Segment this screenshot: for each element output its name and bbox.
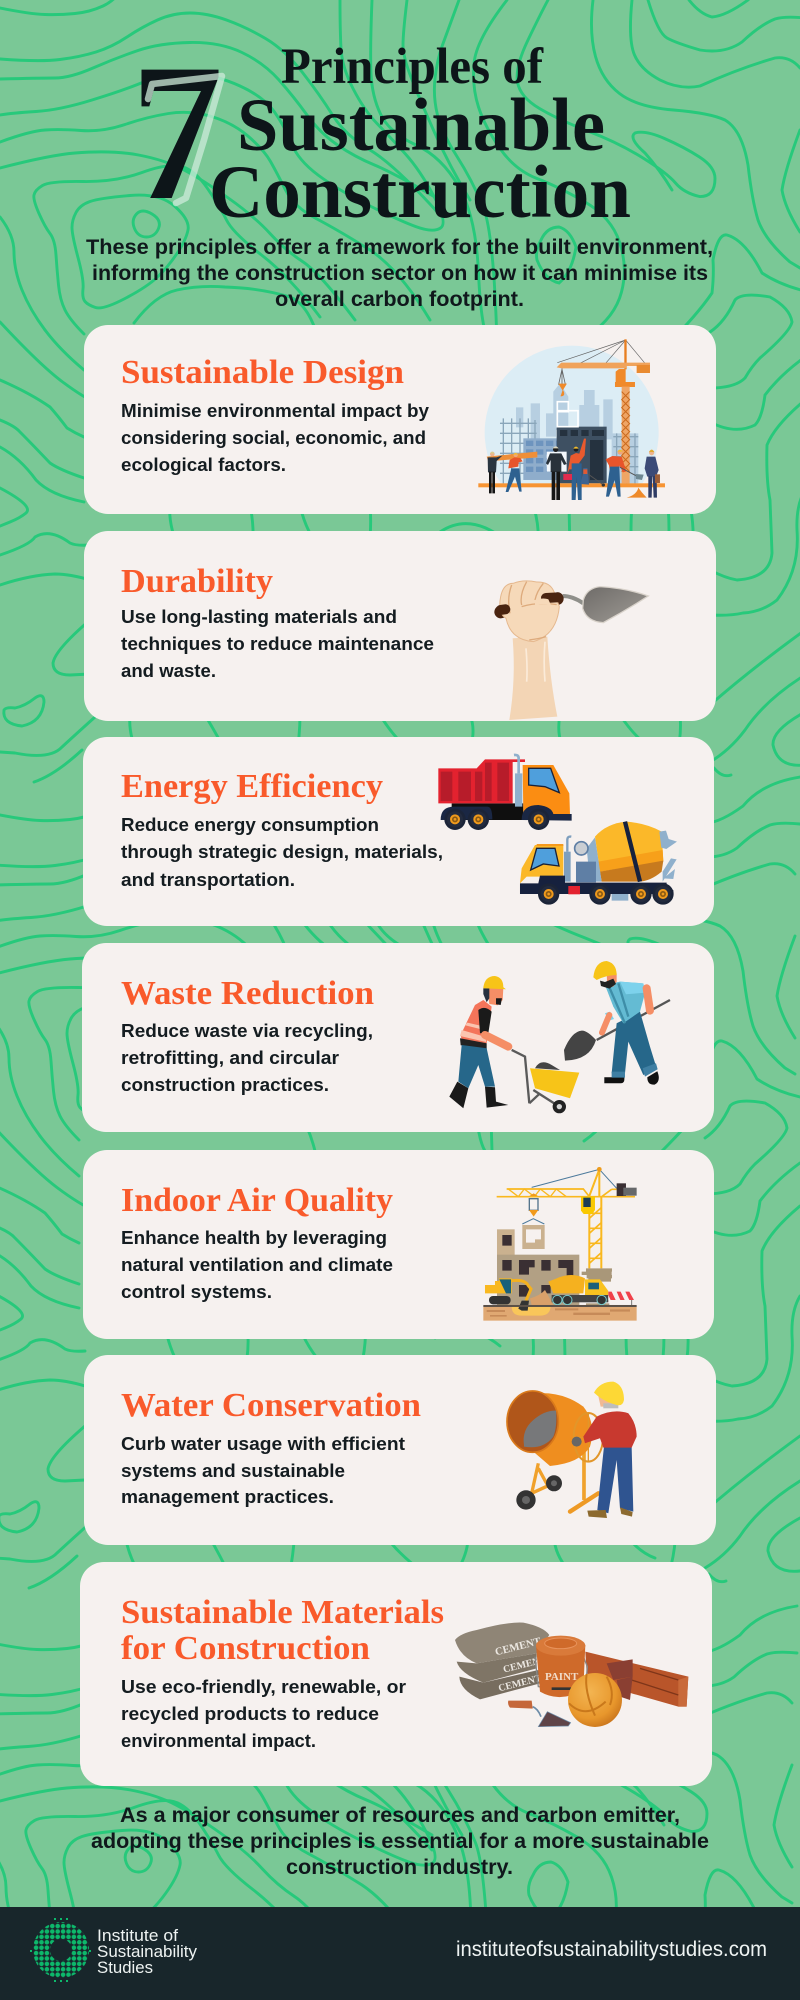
icon: cement bags, paint, helmet, bricks, wood and trowel: CEMENT bbox=[502, 1654, 548, 1676]
panel: sustainable materials bbox=[80, 1562, 712, 1786]
website: instituteofsustainabilitystudies.com bbox=[456, 1938, 767, 1961]
body text: and waste. bbox=[121, 660, 216, 681]
body text: retrofitting, and circular bbox=[121, 1047, 339, 1068]
closing text: adopting these principles is essential for a more sustainable bbox=[91, 1829, 709, 1853]
body text: Reduce energy consumption bbox=[121, 814, 379, 835]
body text: control systems. bbox=[121, 1281, 272, 1302]
panel: energy efficiency bbox=[83, 737, 714, 926]
organisation name: Institute of bbox=[97, 1926, 178, 1945]
heading: Durability bbox=[121, 563, 273, 600]
body text: natural ventilation and climate bbox=[121, 1254, 393, 1275]
body text bbox=[121, 1433, 405, 1507]
body text: recycled products to reduce bbox=[121, 1703, 379, 1724]
intro text: These principles offer a framework for the built environment, bbox=[86, 235, 713, 259]
organisation name: Sustainability bbox=[97, 1942, 197, 1961]
icon: worker at cement mixer bbox=[507, 1382, 637, 1518]
title: Sustainable bbox=[237, 84, 605, 167]
heading: for Construction bbox=[121, 1630, 370, 1667]
panel: water conservation bbox=[84, 1355, 716, 1545]
numeral seven: 7 bbox=[131, 24, 223, 241]
body text bbox=[121, 1020, 373, 1095]
title bbox=[131, 24, 631, 241]
heading: Waste Reduction bbox=[121, 975, 374, 1012]
body text bbox=[121, 814, 443, 890]
icon: dump truck and cement mixer bbox=[438, 755, 677, 905]
footer bbox=[0, 1907, 800, 2000]
intro text: informing the construction sector on how it can minimise its bbox=[92, 261, 708, 285]
heading: Sustainable Materials bbox=[121, 1594, 444, 1631]
intro text bbox=[86, 235, 713, 311]
heading: Sustainable Design bbox=[121, 354, 404, 391]
body text: Use long-lasting materials and bbox=[121, 606, 397, 627]
icon: cement bags, paint, helmet, bricks, wood and trowel: CEMENT bbox=[494, 1636, 542, 1658]
body text: Use eco-friendly, renewable, or bbox=[121, 1676, 406, 1697]
closing text: construction industry. bbox=[286, 1855, 513, 1879]
body text bbox=[121, 606, 434, 681]
body text: Reduce waste via recycling, bbox=[121, 1020, 373, 1041]
icon: cement bags, paint, helmet, bricks, wood and trowel bbox=[455, 1623, 688, 1727]
heading: Water Conservation bbox=[121, 1387, 421, 1424]
logo mark bbox=[30, 1918, 91, 1982]
body text: ecological factors. bbox=[121, 454, 286, 475]
closing text: As a major consumer of resources and carbon emitter, bbox=[120, 1803, 680, 1827]
panel: durability bbox=[84, 531, 716, 721]
icon: cement bags, paint, helmet, bricks, wood and trowel: CEMENT bbox=[497, 1673, 543, 1694]
organisation name bbox=[97, 1926, 197, 1977]
icon: workers with wheelbarrow and shovel bbox=[449, 961, 670, 1113]
heading: Indoor Air Quality bbox=[121, 1182, 393, 1219]
body text: through strategic design, materials, bbox=[121, 841, 443, 862]
body text: Curb water usage with efficient bbox=[121, 1433, 405, 1454]
body text: Enhance health by leveraging bbox=[121, 1227, 387, 1248]
heading bbox=[121, 1594, 444, 1667]
title: Principles of bbox=[281, 39, 544, 95]
body text: techniques to reduce maintenance bbox=[121, 633, 434, 654]
body text: Minimise environmental impact by bbox=[121, 400, 430, 421]
icon: hand holding trowel bbox=[500, 581, 648, 720]
body text bbox=[121, 400, 430, 475]
body text: construction practices. bbox=[121, 1074, 329, 1095]
intro text: overall carbon footprint. bbox=[275, 287, 524, 311]
icon: cement bags, paint, helmet, bricks, wood and trowel: PAINT bbox=[545, 1672, 578, 1683]
heading: Energy Efficiency bbox=[121, 768, 383, 805]
body text: environmental impact. bbox=[121, 1730, 316, 1751]
body text: and transportation. bbox=[121, 869, 295, 890]
panel: sustainable design bbox=[84, 325, 716, 514]
body text bbox=[121, 1676, 406, 1751]
panel: indoor air quality bbox=[83, 1150, 714, 1339]
closing text bbox=[91, 1803, 709, 1879]
icon: city construction scene bbox=[478, 339, 665, 500]
body text bbox=[121, 1227, 393, 1302]
body text: management practices. bbox=[121, 1486, 334, 1507]
title: Construction bbox=[209, 151, 631, 234]
body text: considering social, economic, and bbox=[121, 427, 426, 448]
icon: crane on building site bbox=[483, 1167, 637, 1321]
body text: systems and sustainable bbox=[121, 1460, 345, 1481]
organisation name: Studies bbox=[97, 1958, 153, 1977]
panel: waste reduction bbox=[82, 943, 714, 1132]
